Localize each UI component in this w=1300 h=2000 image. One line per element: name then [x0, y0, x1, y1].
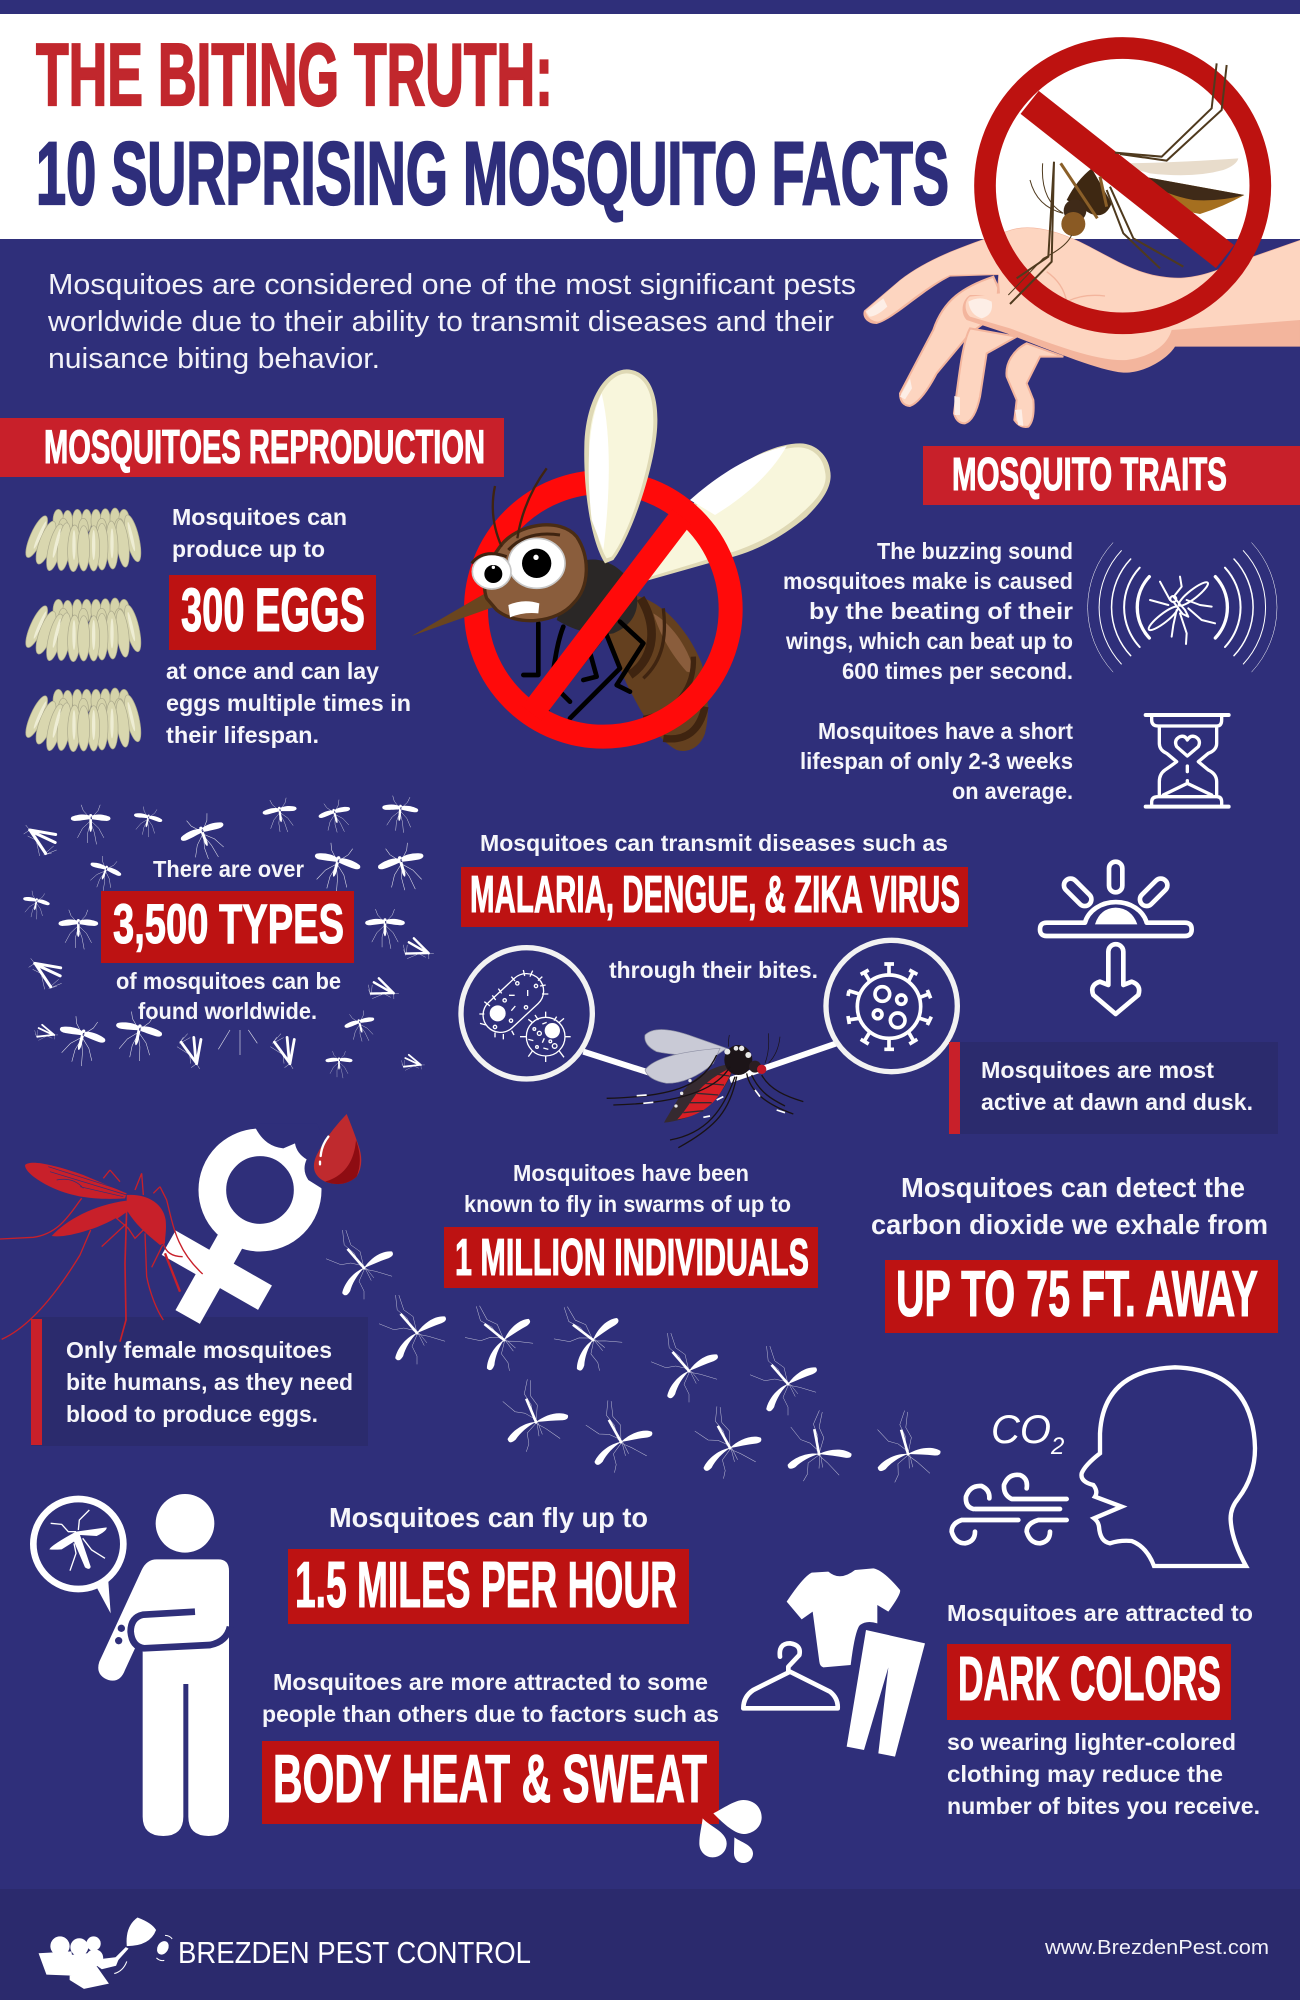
icon: clothes and hanger	[743, 1568, 925, 1757]
text block: body heat and sweat	[262, 1669, 719, 1824]
illustration: female symbol with blood drop and red mosquito	[0, 1114, 361, 1342]
text block: short lifespan: on average.	[952, 778, 1073, 804]
header band	[0, 14, 1300, 239]
illustration: angry mosquito with prohibition sign	[412, 369, 831, 751]
icon: bacteria circle	[461, 948, 592, 1079]
icon: head exhaling CO2: CO	[991, 1408, 1051, 1452]
icon: buzzing mosquito	[1088, 543, 1277, 672]
text block: 300 eggs: at once and can lay	[166, 658, 379, 684]
text block: swarms: Mosquitoes have been	[513, 1160, 749, 1186]
text block: swarms	[444, 1160, 818, 1288]
icon: hourglass	[1146, 715, 1229, 807]
text block: 300 eggs: Mosquitoes can	[172, 504, 347, 530]
text block: 3,500 types: of mosquitoes can be	[116, 968, 341, 994]
callout: active at dawn and dusk	[949, 1042, 1278, 1134]
title: THE BITING TRUTH:	[36, 25, 553, 124]
illustration: hand with mosquito and prohibition sign	[863, 48, 1300, 427]
text block: buzzing sound: wings, which can beat up to	[785, 628, 1073, 654]
icon: head exhaling CO2	[952, 1367, 1255, 1566]
text block: diseases: through their bites.	[609, 957, 818, 983]
text block: buzzing sound: The buzzing sound	[877, 538, 1073, 564]
text block: dark colors: clothing may reduce the	[947, 1761, 1223, 1787]
text block: swarms: 1 MILLION INDIVIDUALS	[455, 1229, 809, 1287]
text block: dark colors: so wearing lighter-colored	[947, 1729, 1236, 1755]
text block: short lifespan	[800, 718, 1073, 804]
icon: head exhaling CO2: 2	[1050, 1433, 1064, 1460]
text block: short lifespan: Mosquitoes have a short	[818, 718, 1073, 744]
intro text: nuisance biting behavior.	[48, 343, 380, 375]
text block: buzzing sound	[783, 538, 1073, 684]
illustration: tiger mosquito	[607, 1030, 803, 1148]
text block: dark colors: number of bites you receive.	[947, 1793, 1260, 1819]
text block: 300 eggs: their lifespan.	[166, 722, 319, 748]
icons: buzzing mosquito, hourglass and sunset	[1040, 543, 1277, 1014]
icon: sweat drops	[699, 1800, 762, 1863]
text block: buzzing sound: by the beating of their	[809, 598, 1073, 624]
text block: buzzing sound: 600 times per second.	[842, 658, 1073, 684]
callout text: female mosquitoes: bite humans, as they need	[66, 1369, 353, 1395]
callout text: female mosquitoes	[66, 1337, 353, 1427]
text block: 300 eggs: 300 EGGS	[181, 576, 365, 644]
swarm: mosquitoes around types text	[20, 795, 435, 1078]
callout text: female mosquitoes: Only female mosquitoes	[66, 1337, 332, 1363]
text block: carbon dioxide: carbon dioxide we exhale from	[871, 1209, 1268, 1240]
text block: 300 eggs	[166, 504, 411, 748]
text block: body heat and sweat: BODY HEAT & SWEAT	[273, 1741, 707, 1817]
callout panel: female mosquitoes background	[31, 1317, 368, 1446]
swarm: flying mosquitoes	[326, 1230, 950, 1496]
text block: dark colors: Mosquitoes are attracted to	[947, 1600, 1253, 1626]
text block: diseases: Mosquitoes can transmit diseases such as	[480, 830, 948, 856]
text block: 3,500 types: 3,500 TYPES	[113, 892, 344, 955]
banner: mosquitoes reproduction: MOSQUITOES REPRODUCTION	[44, 420, 485, 473]
callout text: female mosquitoes: blood to produce eggs.	[66, 1401, 318, 1427]
title	[36, 25, 949, 223]
text block: buzzing sound: mosquitoes make is caused	[783, 568, 1073, 594]
text block: 3,500 types: There are over	[153, 856, 304, 882]
icon: sunset with down arrow	[1040, 862, 1192, 1014]
icon: mosquito eggs	[22, 508, 144, 752]
text block: body heat and sweat: people than others due to factors such as	[262, 1701, 719, 1727]
text block: carbon dioxide	[871, 1172, 1278, 1333]
icon: virus circle	[826, 940, 957, 1072]
intro text: worldwide due to their ability to transmit diseases and their	[47, 306, 834, 338]
diagram: disease carrier mosquito with germ and virus circles	[461, 940, 957, 1148]
text block: body heat and sweat: Mosquitoes are more attracted to some	[273, 1669, 708, 1695]
intro text	[47, 269, 856, 375]
website: www.BrezdenPest.com	[1044, 1937, 1269, 1959]
text block: diseases	[461, 830, 968, 983]
text block: 300 eggs: produce up to	[172, 536, 325, 562]
footer	[0, 1889, 1300, 2000]
callout: active at dawn and dusk: Mosquitoes are most	[981, 1057, 1214, 1083]
logo: Brezden Pest Control	[39, 1917, 531, 1989]
banner: mosquitoes reproduction	[0, 418, 504, 477]
icon: person with mosquito bites	[33, 1494, 230, 1836]
text block: carbon dioxide: Mosquitoes can detect the	[901, 1172, 1245, 1203]
text block: flight speed: Mosquitoes can fly up to	[329, 1502, 648, 1533]
text block: dark colors	[947, 1600, 1260, 1819]
logo: Brezden Pest Control: BREZDEN PEST CONTROL	[178, 1935, 531, 1970]
text block: swarms: known to fly in swarms of up to	[464, 1191, 791, 1217]
callout: active at dawn and dusk: active at dawn and dusk.	[981, 1089, 1253, 1115]
text block: 3,500 types: found worldwide.	[138, 998, 317, 1024]
text block: 3,500 types	[101, 856, 354, 1024]
text block: short lifespan: lifespan of only 2-3 weeks	[800, 748, 1073, 774]
intro text: Mosquitoes are considered one of the most significant pests	[48, 269, 856, 301]
text block: flight speed	[288, 1502, 689, 1624]
text block: 300 eggs: eggs multiple times in	[166, 690, 411, 716]
text block: flight speed: 1.5 MILES PER HOUR	[295, 1548, 677, 1621]
